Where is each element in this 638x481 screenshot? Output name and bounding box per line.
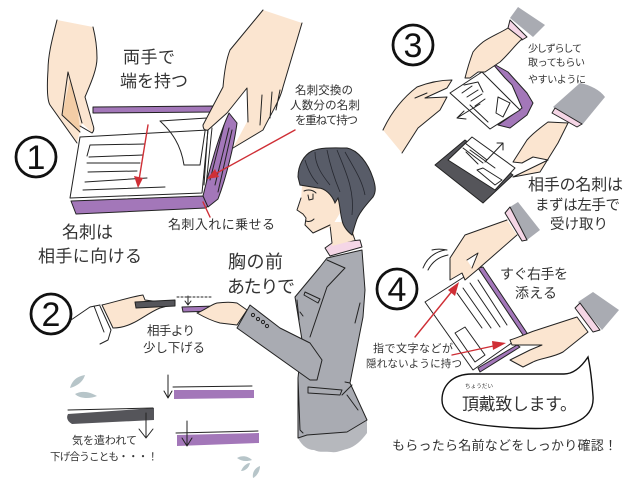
heading: chest: あたりで: [227, 277, 295, 297]
panel: step 1 hold the card: [16, 10, 360, 266]
hair: [298, 148, 375, 235]
note: both lower: [50, 433, 158, 463]
note: shift: やすいように: [528, 74, 586, 86]
jacket details: [297, 260, 360, 433]
right hand: [510, 317, 588, 367]
note: left hand first: [528, 176, 623, 233]
heading: hold ends 2: 端を持つ: [120, 72, 188, 91]
lower hand: [513, 122, 568, 177]
sleeve right: [575, 292, 619, 332]
note: both lower: 気を遣われて: [72, 433, 137, 447]
sleeve top: [505, 202, 540, 241]
panel: step 4 receive: [366, 202, 619, 453]
sleeve buttons: [251, 313, 269, 328]
arm: [237, 305, 322, 380]
note: lower: [143, 324, 205, 355]
jacket: [295, 250, 367, 438]
card case bottom and spine: [71, 113, 237, 214]
speech bubble: ちょうだい: [465, 383, 493, 390]
note: fingers: [366, 341, 462, 370]
face features: [304, 190, 316, 221]
note: shift: [528, 42, 586, 86]
motion lines: [423, 249, 448, 270]
panel: step 3 exchange: [383, 7, 623, 233]
business card: [70, 118, 212, 198]
note: face the card: [38, 223, 142, 266]
top sleeve: [508, 7, 545, 40]
speech bubble: 頂戴致します。: [462, 395, 577, 414]
note: left hand first: 受け取り: [550, 216, 608, 233]
note: lower: 相手より: [147, 324, 195, 338]
right hand: [197, 302, 247, 325]
heading: hold ends with both hands: 両手で: [123, 48, 175, 67]
note: stack: を重ねて持つ: [295, 113, 358, 127]
circled number 2: 2: [42, 296, 60, 334]
purple front edge: [478, 345, 520, 372]
purple case: [492, 63, 533, 128]
note: fingers: 指で文字などが: [373, 341, 453, 355]
note: add right hand: 添える: [515, 285, 557, 301]
bar: dark card: [67, 408, 154, 438]
right hand: [203, 10, 302, 148]
note: face the card: 相手に向ける: [38, 247, 142, 266]
note: put on case: 名刺入れに乗せる: [168, 217, 275, 232]
note: stack: [290, 83, 360, 127]
dark case card: [448, 137, 515, 190]
neck: [330, 222, 355, 246]
top hand: [450, 220, 517, 280]
circled number 4: 4: [388, 271, 406, 309]
lower sleeve: [552, 83, 605, 127]
note: both lower: 下げ合うことも・・・！: [50, 450, 158, 463]
card held: [450, 72, 520, 129]
circled number 2: [31, 294, 71, 334]
circled number 4: [377, 269, 417, 309]
card case top edge: [93, 106, 214, 113]
red line: case: [203, 202, 210, 217]
circled number 3: [393, 25, 433, 65]
left hand: [383, 80, 452, 153]
top hand: [465, 28, 522, 78]
note: left hand first: まずは左手で: [535, 197, 620, 214]
note: lower: 少し下げる: [143, 341, 205, 355]
note: shift: 少しずらして: [528, 42, 582, 55]
dark case: [435, 140, 513, 203]
red arrow: to stack: [207, 130, 295, 179]
note: confirm: もらったら名前などをしっかり確認！: [392, 438, 617, 453]
card with purple edges: [425, 267, 527, 370]
face: [297, 180, 345, 233]
note: face the card: 名刺は: [62, 223, 113, 242]
partner card dark: [135, 300, 175, 308]
heading: chest: 胸の前: [228, 252, 283, 272]
heading: chest: [227, 252, 295, 297]
red arrow right: [452, 341, 506, 355]
bar: purple 1: [164, 375, 254, 399]
guide dash and arrow: [177, 296, 212, 305]
panel: step 2 hold lower: [31, 252, 295, 478]
purple card: [182, 306, 217, 312]
note: left hand first: 相手の名刺は: [528, 176, 623, 194]
left hand: [47, 20, 97, 143]
note: stack: 人数分の名刺: [290, 98, 360, 112]
note: shift: 取ってもらい: [528, 57, 585, 69]
left sleeve lines: [71, 305, 111, 344]
hair strands: [305, 150, 365, 215]
circled number 1: [16, 137, 56, 177]
note: add right hand: [500, 266, 568, 301]
note: fingers: 隠れないように持つ: [366, 357, 462, 370]
speech bubble: [442, 357, 593, 428]
skirt: [298, 420, 367, 452]
note: stack: 名刺交換の: [295, 83, 353, 97]
bar: purple 2: [176, 421, 259, 446]
note: add right hand: すぐ右手を: [500, 266, 568, 282]
red arrow up: [415, 282, 459, 337]
motion marks: [70, 375, 260, 478]
figure: woman: [237, 148, 375, 452]
collar: [325, 240, 362, 256]
circled number 1: 1: [27, 139, 45, 177]
circled number 3: 3: [404, 27, 422, 65]
red arrow: to card: [134, 125, 148, 188]
left hand: [102, 295, 175, 328]
